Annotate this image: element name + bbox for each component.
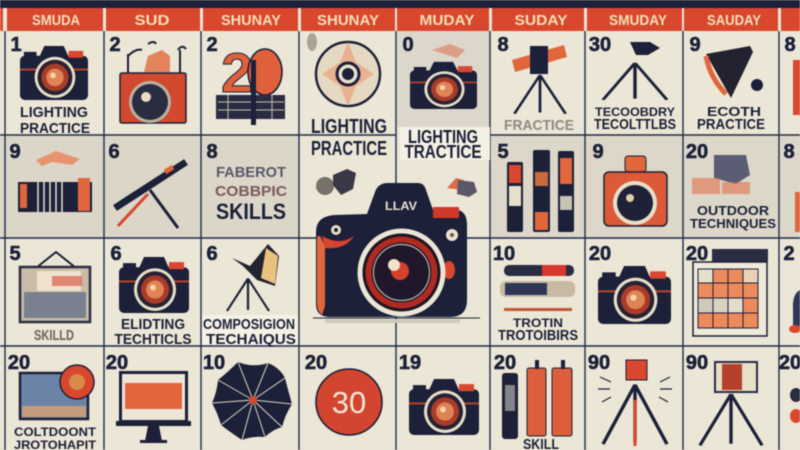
cell: row 4 col 4 countdown badge: 30: [332, 385, 366, 420]
cell: row 2 col 3 skills: FABEROT: [216, 164, 286, 181]
cell: row 3 col 9 partial figure: 2: [783, 243, 795, 265]
cell: row 4 col 7 tripod: 90: [588, 352, 610, 374]
cell: row 1 col 3 big twenty: 2: [221, 41, 253, 104]
cell: row 1 col 6 tripod: FRACTICE: [504, 117, 574, 134]
weekday header bar: SMUDAY: [609, 12, 667, 29]
shaded second row left: [0, 136, 299, 238]
cell: row 4 col 2 monitor: 20: [106, 352, 128, 374]
cell: row 3 col 3 softbox tripod: COMPOSIGION: [203, 316, 295, 333]
cell: row 1 col 9 partial: [784, 34, 800, 115]
cell: row 1 col 1 camera: 1: [10, 34, 22, 56]
cell: row 1 col 3 big twenty: [206, 34, 285, 125]
cell: row 1 col 6 tripod: 8: [497, 34, 509, 56]
cell: row 2 col 3 skills: SKILLS: [216, 199, 286, 224]
cell: row 1 col 5 camera: TRACTICE: [404, 142, 482, 162]
cell: row 1 col 8 softbox: [689, 34, 765, 133]
weekday header bar: [0, 8, 800, 31]
cell: row 3 col 6 rolled bars: [493, 243, 578, 344]
weekday header bar: SAUDAY: [707, 12, 761, 29]
cell: row 1 col 5 camera: [402, 34, 482, 162]
cell: row 2 col 3 skills: COBBPIC: [215, 183, 287, 200]
cell: row 3 col 9 partial figure: [783, 243, 800, 333]
cell: row 3 col 2 camera: TECHTICLS: [114, 331, 192, 348]
cell: row 3 col 6 rolled bars: TROTIN: [513, 316, 563, 330]
cell: row 3 col 7 camera: [589, 243, 671, 324]
cell: row 3 col 1 hanging sign: SKILLD: [34, 327, 74, 344]
cell: row 3 col 8 calendar: 20: [686, 243, 708, 265]
cell: row 2 col 8 outdoor: OUTDOOR: [697, 203, 770, 218]
cell: row 3 col 1 hanging sign: [9, 243, 90, 344]
white label patch: composition: [202, 315, 298, 346]
cell: row 2 col 7 red camera: [592, 141, 667, 226]
cell: row 4 col 4 countdown badge: [305, 352, 382, 435]
cell: row 1 col 7 tripod: [589, 34, 676, 133]
cell: row 1 col 8 softbox: 9: [689, 34, 701, 56]
cell: row 2 col 1 telephoto lens: [9, 141, 92, 212]
cell: row 3 col 7 camera: 20: [589, 243, 611, 265]
cell: row 3 col 3 softbox tripod: [203, 243, 296, 348]
cell: row 2 col 6 bars: [497, 141, 574, 232]
cell: row 1 col 9 partial: 8: [784, 34, 796, 56]
cell: row 2 col 9 partial: [783, 141, 800, 232]
cell: row 1 col 1 camera: [10, 34, 90, 137]
top dark band: [0, 0, 800, 8]
cell: row 1 col 7 tripod: 30: [589, 34, 611, 56]
cell: row 1 col 2 red camera: [109, 34, 186, 123]
cell: row 1 col 7 tripod: TECOLTTLBS: [594, 116, 676, 133]
cell: row 2 col 6 bars: 5: [497, 141, 509, 163]
shaded second row right: [490, 136, 800, 238]
weekday header bar: SUD: [134, 12, 170, 29]
cell: row 2 col 1 telephoto lens: 9: [9, 141, 21, 163]
cell: row 1 col 6 tripod: [497, 34, 574, 134]
weekday header bar: SHUNAY: [221, 12, 281, 29]
cell: row 1 col 8 softbox: ECOTH: [707, 104, 761, 119]
cell: row 2 col 7 red camera: 9: [592, 141, 604, 163]
cell: row 1 col 4 lens dial: PRACTICE: [311, 138, 387, 160]
cell: row 1 col 3 big twenty: 2: [206, 34, 218, 56]
cell: row 2 col 8 outdoor: TECHNIQUES: [690, 216, 776, 231]
cell: row 2 col 3 skills: [206, 141, 287, 224]
cell: row 4 col 5 camera: [399, 352, 479, 435]
cell: row 4 col 8 tripod: [686, 352, 762, 445]
cell: row 2 col 8 outdoor: [686, 141, 776, 231]
cell: row 2 col 8 outdoor: 20: [686, 141, 708, 163]
cell: row 4 col 3 umbrella: 10: [203, 352, 225, 374]
cell: row 4 col 6 bars: 20: [494, 352, 516, 374]
large centre camera: LLAV: [385, 199, 417, 213]
cell: row 4 col 6 bars: [494, 352, 572, 450]
cell: row 1 col 4 lens dial: LIGHTING: [311, 116, 387, 138]
cell: row 1 col 5 camera: LIGHTING: [408, 127, 478, 147]
cell: row 3 col 2 camera: 6: [110, 243, 122, 265]
cell: row 4 col 4 countdown badge: 20: [305, 352, 327, 374]
cell: row 4 col 8 tripod: 90: [686, 352, 708, 374]
cell: row 1 col 2 red camera: 2: [109, 34, 121, 56]
cell: row 3 col 8 calendar: [686, 243, 768, 336]
cell: row 3 col 3 softbox tripod: 6: [206, 243, 218, 265]
cell: row 4 col 3 umbrella: [203, 352, 292, 440]
weekday header bar: SUDAY: [514, 12, 568, 29]
cell: row 4 col 1 screen: 20: [8, 352, 30, 374]
cell: row 1 col 1 camera: LIGHTING: [20, 104, 88, 121]
cell: row 3 col 1 hanging sign: 5: [9, 243, 21, 265]
weekday header bar: SMUDA: [32, 12, 80, 29]
cell: row 3 col 2 camera: ELIDTING: [121, 316, 185, 333]
large centre camera: [313, 169, 480, 323]
cell: row 1 col 8 softbox: PRACTICE: [697, 116, 765, 133]
cell: row 4 col 2 monitor: [106, 352, 191, 443]
cell: row 3 col 6 rolled bars: TROTOIBIRS: [498, 327, 578, 344]
cell: row 1 col 4 lens dial: [307, 33, 387, 160]
cell: row 4 col 9 partial: [779, 352, 800, 423]
weekday header bar: MUDAY: [420, 12, 474, 29]
cell: row 1 col 1 camera: PRACTICE: [20, 120, 90, 137]
cell: row 3 col 2 camera: [110, 243, 192, 348]
cell: row 2 col 2 crossed bars: 6: [108, 141, 120, 163]
cell: row 1 col 5 camera: 0: [402, 34, 414, 56]
cell: row 4 col 5 camera: 19: [399, 352, 421, 374]
cell: row 3 col 3 softbox tripod: TECHAIQUS: [206, 331, 296, 348]
shaded cell row 1 col 5: [397, 31, 490, 127]
cell: row 2 col 2 crossed bars: [108, 141, 186, 228]
white label patch: lighting practice: [400, 127, 490, 160]
cell: row 2 col 3 skills: 8: [206, 141, 218, 163]
cell: row 3 col 6 rolled bars: 10: [493, 243, 515, 265]
cell: row 4 col 1 screen: COLTDOONT: [14, 425, 97, 439]
cell: row 1 col 7 tripod: TECOOBDRY: [595, 105, 675, 119]
cell: row 4 col 1 screen: [8, 352, 97, 450]
weekday header bar: SHUNAY: [317, 12, 379, 29]
cell: row 4 col 7 tripod: [588, 352, 672, 446]
cell: row 2 col 9 partial: 8: [783, 141, 795, 163]
